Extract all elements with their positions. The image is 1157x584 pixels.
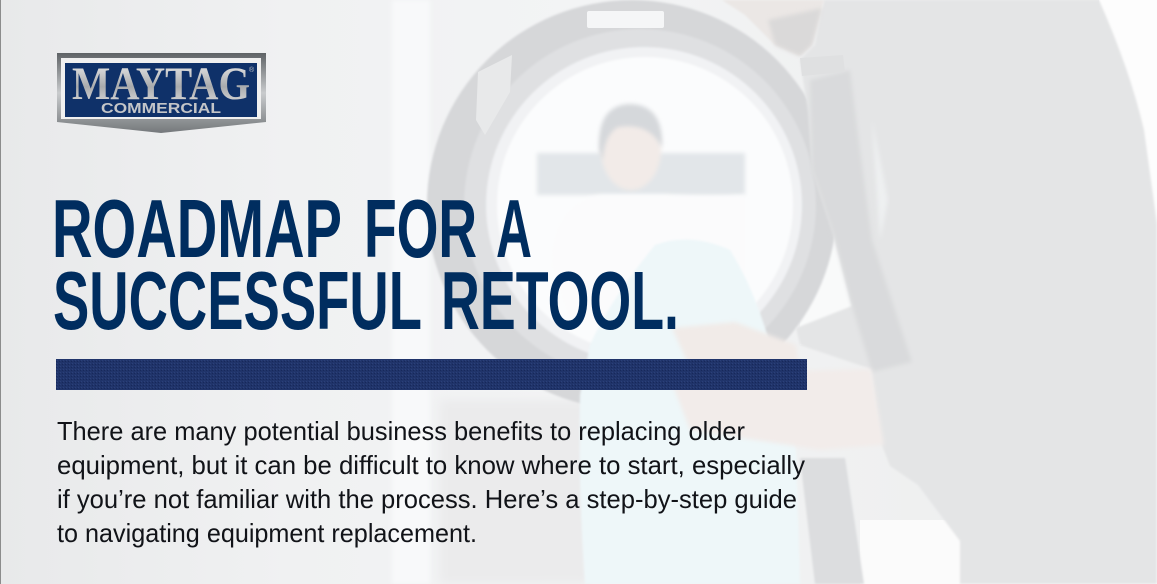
trousers <box>800 458 864 584</box>
towel <box>580 240 800 584</box>
door handle detail <box>587 11 664 28</box>
man's face <box>722 0 824 56</box>
intro text: equipment, but it can be difficult to know where to start, especially <box>57 450 805 480</box>
intro text: There are many potential business benefits to replacing older <box>57 416 745 446</box>
door glass <box>497 57 793 353</box>
divider bar <box>56 359 807 390</box>
washer door ring <box>427 0 837 410</box>
title: RETOOL. <box>441 254 679 347</box>
logo: Maytag Commercial: MAYTAG <box>72 58 250 110</box>
intro text <box>57 416 805 548</box>
title: A <box>496 182 532 275</box>
title: ROADMAP <box>52 182 342 275</box>
intro text: to navigating equipment replacement. <box>57 518 477 548</box>
man in dark jacket <box>796 0 1157 584</box>
title: SUCCESSFUL <box>53 254 422 347</box>
child in the door glass <box>537 104 745 330</box>
intro text: if you’re not familiar with the process. Here’s a step-by-step guide <box>57 484 797 514</box>
door hinge <box>476 55 512 135</box>
logo: Maytag Commercial: COMMERCIAL <box>101 101 221 117</box>
logo: Maytag Commercial: ® <box>249 66 255 74</box>
logo: Maytag Commercial <box>57 53 266 133</box>
title: FOR <box>364 182 477 275</box>
title <box>52 182 679 347</box>
man's hands <box>672 322 800 372</box>
